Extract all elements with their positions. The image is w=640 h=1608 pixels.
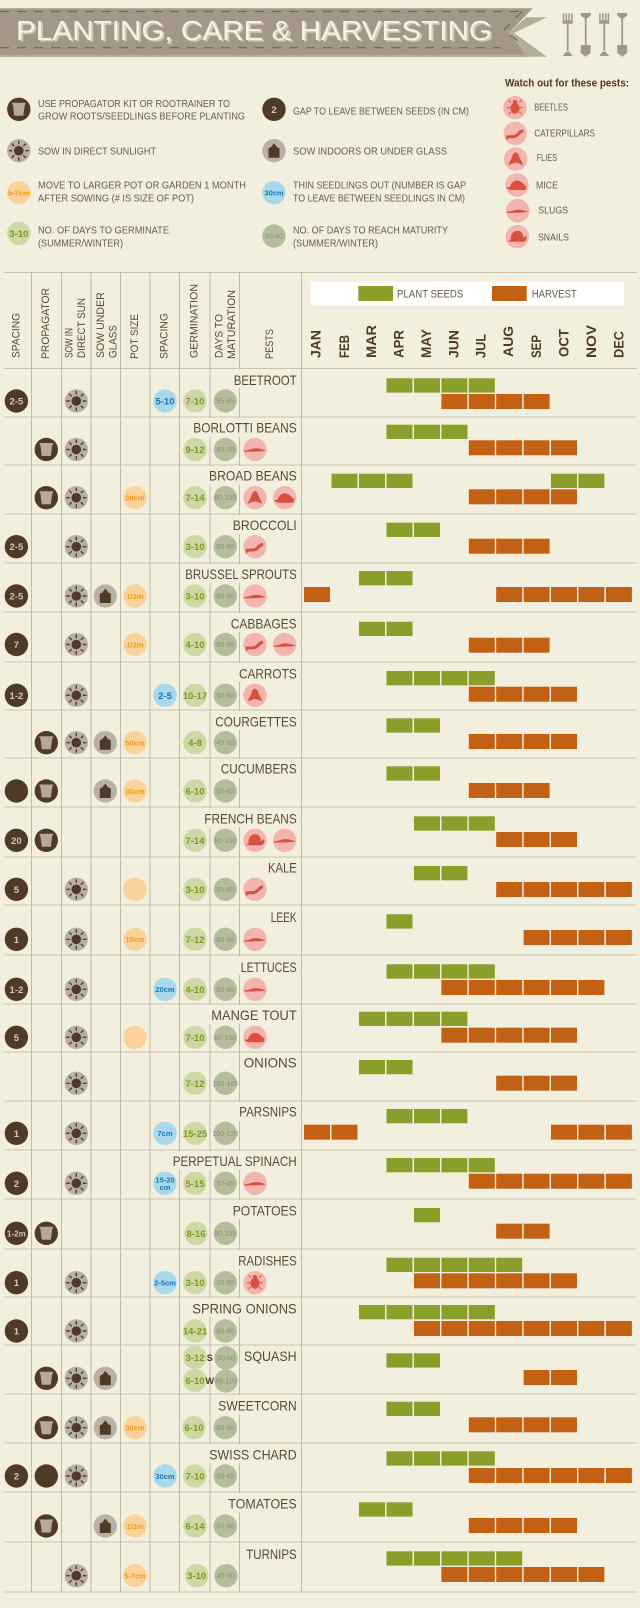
icons: 5 [14,885,20,896]
icons: 3-10 [185,1278,205,1289]
plant bars [386,1258,522,1272]
icons: 6-10 [184,1423,204,1434]
pests heading: Watch out for these pests: [505,78,629,90]
key: thinning: 30cm [264,188,284,198]
icons: 2 [14,1472,19,1482]
icons: 20-50 [216,1280,234,1287]
name: LEEK [271,909,297,925]
icons: 2-5 [10,542,24,553]
icons: 4-10 [185,640,205,651]
icons: 45-60 [217,1573,235,1580]
pest: slugs: SLUGS [538,204,568,216]
month headers: MAY [418,328,434,358]
key: under glass [262,139,447,162]
key: maturity: (SUMMER/WINTER) [293,238,378,249]
row: lettuces [5,956,604,1001]
table column headers: SOW IN [63,328,75,358]
key: propagator: GROW ROOTS/SEEDLINGS BEFORE PLANTING [38,112,245,123]
name: CARROTS [239,666,297,682]
table column headers: DAYS TO [213,314,225,358]
table column headers: SPACING [10,313,22,358]
key: thinning: THIN SEEDLINGS OUT (NUMBER IS GAP [293,181,466,192]
icons: 1 [14,935,20,946]
icons: 2-5 [10,396,24,408]
icons: 30cm [125,494,145,503]
row: beetroot [5,370,550,413]
name: TOMATOES [228,1496,297,1512]
icons: 80-90 [216,594,234,600]
name: LETTUCES [241,959,297,975]
key: maturity: 45-60 [265,234,283,240]
plant bars [386,425,467,439]
icons: 80-100 [214,838,236,845]
table column headers [10,284,276,359]
month headers: MAR [363,325,379,358]
germination and maturity badges: 50-60 [217,1356,235,1362]
plant bars [386,964,495,979]
icons: 55-80 [216,987,234,994]
icons: 6-14 [185,1522,205,1532]
icons: 2-5cm [154,1278,176,1287]
name: CABBAGES [231,615,297,631]
plant bars [359,1502,412,1517]
icons: 55-65 [216,788,234,796]
row: courgettes [35,711,577,754]
table column headers: PESTS [264,329,276,359]
plant bars [386,523,440,537]
germination and maturity badges [183,1346,238,1393]
name: PARSNIPS [239,1104,297,1120]
table column headers: MATURATION [226,290,238,359]
key: germination: 3-10 [9,229,28,240]
key: thinning: TO LEAVE BETWEEN SEEDLINGS IN CM) [293,193,465,204]
pest: beetles [503,96,568,119]
icons [5,584,267,608]
germination and maturity badges: 6-10 [185,1376,205,1387]
pest: caterpillars [504,122,595,145]
row: mange tout [5,1005,577,1049]
month headers: JUN [445,330,461,358]
table column headers: SOW UNDER [95,292,107,358]
icons [5,829,296,852]
icons: 15-25 [183,1129,208,1140]
icons: 3-10 [185,885,205,896]
chart legend: HARVEST [532,288,577,300]
icons [35,1367,117,1390]
icons: 4-10 [185,985,205,996]
icons: 37-45 [216,1181,234,1188]
name: BROCCOLI [233,517,297,533]
icons: 55-80 [216,887,234,894]
plant bars [386,1158,495,1172]
harvest bars [496,1224,550,1239]
key: maturity: NO. OF DAYS TO REACH MATURITY [293,226,448,237]
row: parsnips [5,1102,632,1145]
icons: 50cm [125,739,145,748]
month headers: FEB [336,335,352,358]
harvest bars [469,1518,577,1533]
icons: 50-80 [216,1328,234,1336]
icons: 1/2m [126,640,144,649]
key: thinning [262,181,466,204]
month headers [308,324,626,358]
plant bars [386,378,495,393]
icons: 1-2 [10,691,23,702]
name: PERPETUAL SPINACH [173,1153,297,1169]
name: CUCUMBERS [221,761,297,777]
pest: beetles: BEETLES [534,102,568,114]
name: BEETROOT [234,372,297,388]
key: pot size [7,181,246,204]
key: germination: (SUMMER/WINTER) [38,238,123,249]
row: squash [35,1346,577,1393]
icons: 7-12 [185,1079,205,1090]
icons: 90-105 [214,1231,236,1238]
month headers: APR [391,330,407,358]
icons: 80-90 [216,937,234,944]
row: brussel sprouts [5,564,632,608]
row: broad beans [35,466,604,509]
icons: 100-120 [212,1131,238,1138]
icons: 1 [14,1326,20,1338]
icons: 7 [14,640,19,651]
key: germination [7,222,169,249]
plant bars [386,914,412,929]
icons: 5-10 [155,396,175,408]
icons [5,878,267,901]
pest: caterpillars: CATERPILLARS [534,127,595,139]
icons [65,1564,238,1587]
month headers: JAN [308,330,324,358]
harvest bars [414,1273,577,1288]
icons: 1-2 [10,985,23,996]
icons: 7-10 [185,1033,205,1044]
icons: 5 [14,1033,20,1044]
icons: 60-90 [216,1425,234,1432]
row: spring onions [5,1298,632,1343]
month headers: SEP [528,335,544,358]
key: pot size: AFTER SOWING (# IS SIZE OF POT) [38,193,194,204]
icons: 30cm [125,1423,145,1432]
key: propagator: USE PROPAGATOR KIT OR ROOTRAINER TO [38,99,230,110]
icons [65,1072,238,1095]
row: radishes [5,1250,577,1294]
pest: slugs [506,199,568,222]
germination and maturity badges: S [207,1353,213,1363]
icons [5,779,237,803]
harvest bars [441,394,550,409]
icons: 55-65 [216,398,234,406]
harvest bars [469,687,577,702]
name: POTATOES [233,1202,297,1218]
pest: mice [505,173,558,197]
table column headers: PROPAGATOR [40,288,52,359]
table column headers: GLASS [108,325,120,358]
plant bars [414,866,467,880]
icons: 7cm [157,1129,173,1138]
icons [5,389,237,413]
key: seed gap: 2 [271,105,277,116]
icons [35,438,267,461]
plant bars [386,1353,440,1368]
germination and maturity badges: 3-12 [185,1353,205,1364]
harvest bars [524,930,632,945]
icons: 7-10 [185,396,205,408]
icons: 5-7cm [124,1571,146,1580]
icons [5,1319,237,1343]
icons: 1/2m [126,1522,144,1531]
key: propagator [7,98,245,123]
icons [5,1172,267,1195]
plant bars [386,1451,495,1466]
harvest bars [469,1417,577,1432]
name: SWISS CHARD [209,1446,297,1462]
name: SWEETCORN [218,1397,297,1413]
icons [35,486,296,509]
harvest bars [469,783,550,798]
legend: pests [503,78,629,248]
legend: growing key [7,98,469,249]
row: turnips [65,1543,604,1587]
harvest bars [524,1370,577,1385]
icons [5,535,267,558]
harvest bars [469,1174,632,1189]
name: SQUASH [244,1348,297,1364]
month headers: OCT [555,329,571,357]
chart legend [311,282,624,306]
name: ONIONS [244,1054,297,1070]
pest: flies: FLIES [537,152,557,164]
icons: 5-15 [185,1179,205,1190]
icons: 1-2m [7,1229,26,1238]
plant bars [386,1551,522,1566]
icons [35,1416,237,1439]
row: french beans [5,808,577,852]
icons: 55-65 [216,1474,234,1480]
plant bars [414,1208,440,1222]
row: perpetual spinach [5,1151,632,1195]
harvest bars [414,1321,632,1336]
icons: 55-90 [216,1524,234,1530]
germination and maturity badges: W [205,1376,214,1386]
title banner [0,8,547,57]
row: cucumbers [5,759,550,803]
name: TURNIPS [246,1546,297,1562]
plant bars [386,1109,467,1123]
name: KALE [268,860,297,876]
icons: 50-70 [216,447,234,454]
key: direct sun: SOW IN DIRECT SUNLIGHT [38,146,156,157]
row: swiss chard [5,1444,632,1488]
key: seed gap [262,98,469,121]
icons: 1/2m [126,592,144,601]
key: seed gap: GAP TO LEAVE BETWEEN SEEDS (IN CM) [293,106,469,117]
row: cabbages [5,613,550,656]
title: PLANTING, CARE & HARVESTING [16,15,492,46]
harvest bars [496,882,632,897]
name: BROAD BEANS [209,468,297,484]
icons: 100-165 [212,1081,238,1088]
icons: 6-10 [185,786,205,798]
plant bars [386,1402,440,1416]
plant bars [359,571,412,585]
icons [5,1271,267,1294]
icons: 7-14 [185,836,205,847]
icons: 3-10 [185,542,205,553]
table column headers: POT SIZE [129,314,141,359]
key: pot size: 5-7cm [8,188,30,198]
harvest bars [469,440,577,455]
plant bars [386,718,440,733]
icons: 9-12 [185,445,205,456]
harvest bars [496,832,577,847]
icons [5,1026,267,1049]
harvest bars [304,587,632,602]
icons: 2-5 [10,592,24,602]
icons [5,633,296,656]
name: RADISHES [238,1253,297,1269]
key: germination: NO. OF DAYS TO GERMINATE [38,226,169,237]
icons: 7-12 [185,935,205,946]
plant bars [359,1012,467,1026]
row: tomatoes [35,1493,577,1538]
icons: 7-14 [185,493,205,504]
row: borlotti beans [35,418,577,461]
pest: snails: SNAILS [538,232,569,244]
month headers: DEC [610,331,626,358]
table column headers: GERMINATION [188,284,200,358]
pest: flies [504,147,557,171]
plant bars [359,622,412,636]
icons [35,731,237,754]
plant bars [386,766,440,781]
month headers: JUL [472,334,488,358]
icons: 45-60 [216,740,234,747]
plant bars [359,1305,495,1319]
icons [5,1464,237,1488]
row: broccoli [5,515,550,558]
harvest bars [469,1468,632,1483]
harvest bars [469,539,550,554]
icons: 2-5 [158,691,173,702]
germination and maturity badges: 85-120 [215,1378,237,1386]
table column headers: DIRECT SUN [76,298,88,358]
harvest bars [441,1028,577,1043]
row: kale [5,858,632,901]
table column headers: SPACING [158,313,170,359]
icons: 3-10 [185,592,205,602]
harvest bars [441,980,604,995]
name: BORLOTTI BEANS [193,420,297,436]
plant bars [359,1060,412,1074]
harvest bars [441,1567,604,1582]
chart legend: PLANT SEEDS [397,288,463,300]
key: under glass: SOW INDOORS OR UNDER GLASS [293,146,447,157]
icons [5,928,267,951]
icons [5,1122,238,1145]
icons: 20 [11,836,22,847]
icons [5,1222,237,1245]
icons: cm [160,1183,171,1192]
icons: 60-80 [216,693,234,700]
icons [5,978,267,1001]
icons: 1 [14,1278,20,1289]
icons: 30cm [125,787,145,796]
icons: 14-21 [183,1326,208,1338]
icons: 7-10 [185,1472,205,1482]
plant bars [386,671,495,685]
icons: 60-80 [216,544,234,551]
month headers: AUG [500,326,516,357]
name: BRUSSEL SPROUTS [185,566,297,582]
key: direct sun [7,139,156,162]
name: COURGETTES [215,713,297,729]
icons: 15cm [125,935,145,944]
icons: 10-17 [183,691,207,702]
icons: 65-95 [216,642,234,649]
name: MANGE TOUT [211,1007,297,1023]
icons [5,684,267,707]
icons: 15-20 [155,1176,175,1185]
row: carrots [5,663,577,707]
plant bars [414,816,495,831]
icons: 80-100 [214,495,236,502]
key: maturity [262,224,448,249]
row: sweetcorn [35,1395,577,1439]
harvest bars [496,1076,577,1091]
icons: 2 [14,1179,19,1190]
month headers: NOV [583,324,599,358]
pest: snails [506,225,569,248]
icons: 20cm [155,985,175,994]
icons: 4-8 [188,738,202,749]
icons: 30cm [155,1472,175,1481]
harvest bars [469,489,577,504]
icons [35,1514,237,1538]
icons: 8-16 [186,1229,206,1240]
plant bars [332,474,604,488]
name: SPRING ONIONS [192,1300,297,1316]
icon: garden tools [563,13,627,57]
harvest bars [469,638,550,653]
harvest bars [469,734,577,749]
row: potatoes [5,1200,550,1245]
key: pot size: MOVE TO LARGER POT OR GARDEN 1 MONTH [38,181,246,192]
icons: 1 [14,1129,20,1140]
name: FRENCH BEANS [204,810,297,826]
icons: 3-10 [187,1571,206,1582]
row: onions [65,1053,577,1095]
harvest bars [304,1125,632,1140]
icons: 80-100 [214,1035,236,1042]
pest: mice: MICE [536,180,558,192]
row: leek [5,906,632,951]
